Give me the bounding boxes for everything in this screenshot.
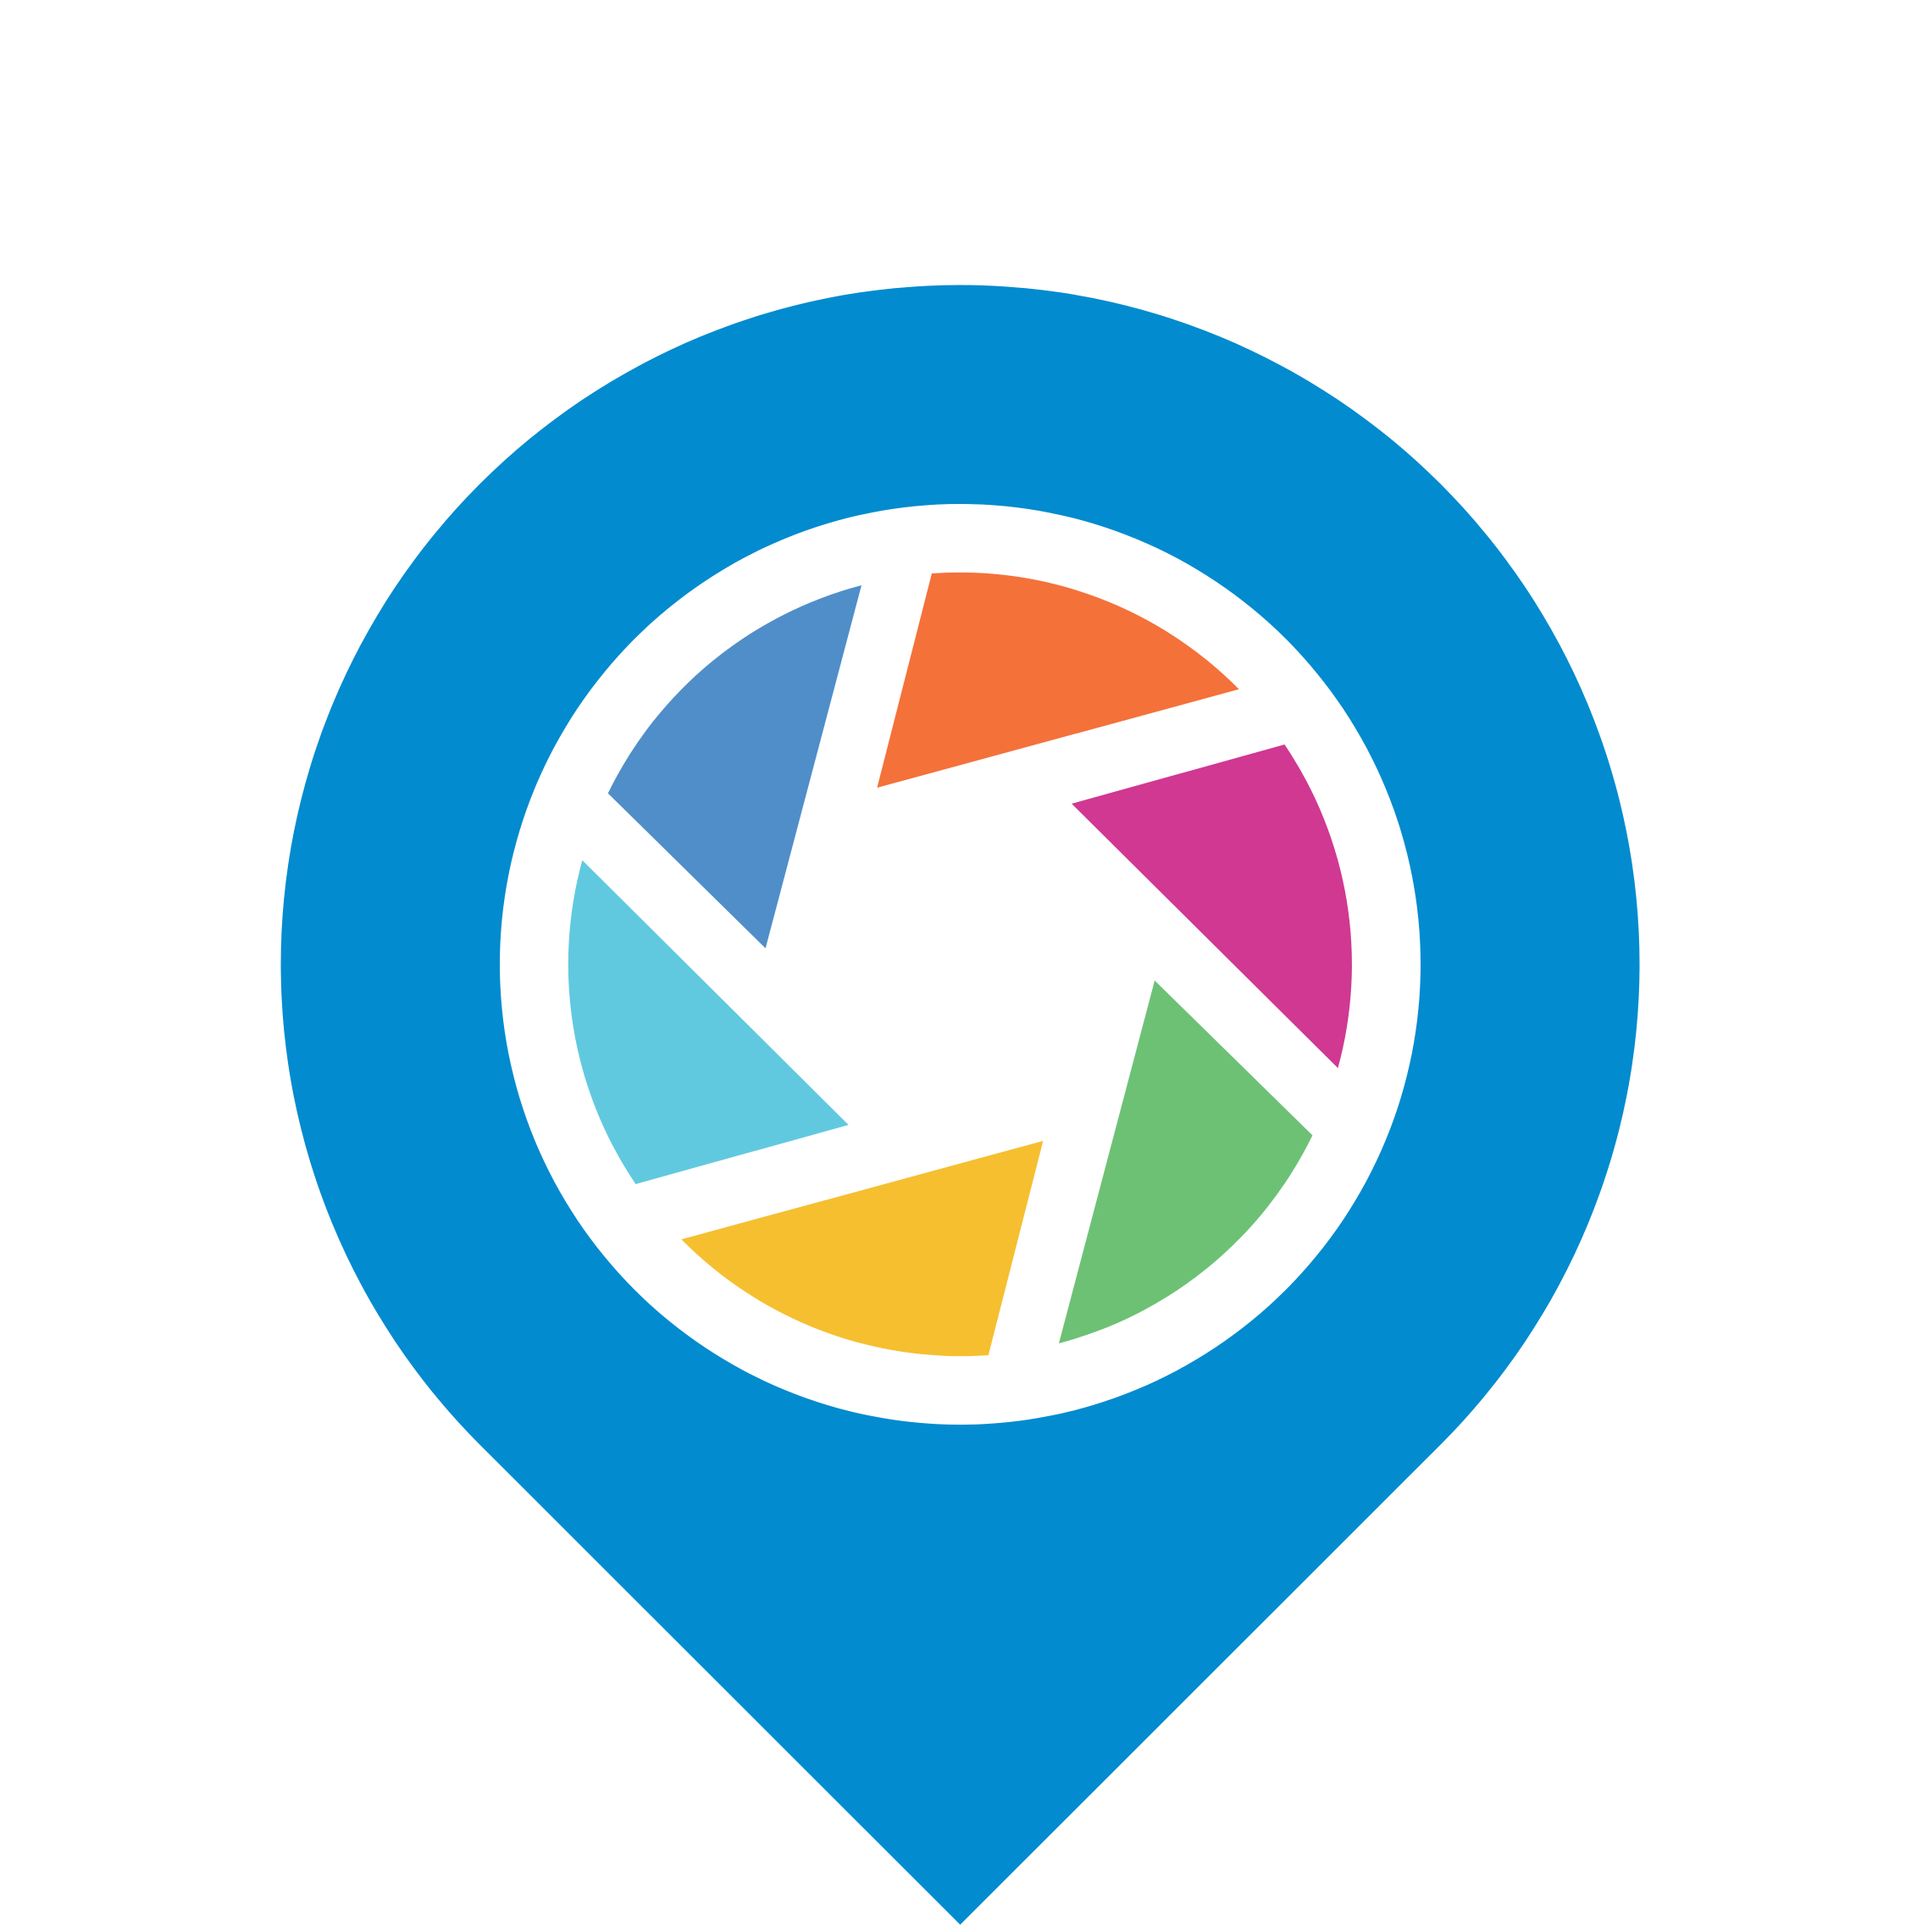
icon: white aperture disc (500, 504, 1421, 1425)
blade: steel blue (608, 585, 862, 949)
blade: yellow (681, 1141, 1043, 1356)
blade: light cyan (568, 861, 849, 1184)
blade: orange (877, 573, 1239, 788)
aperture blades (568, 573, 1352, 1356)
blade: green (1059, 981, 1312, 1343)
icon: blue map pin body (280, 285, 1640, 1924)
blade: magenta (1072, 745, 1352, 1068)
